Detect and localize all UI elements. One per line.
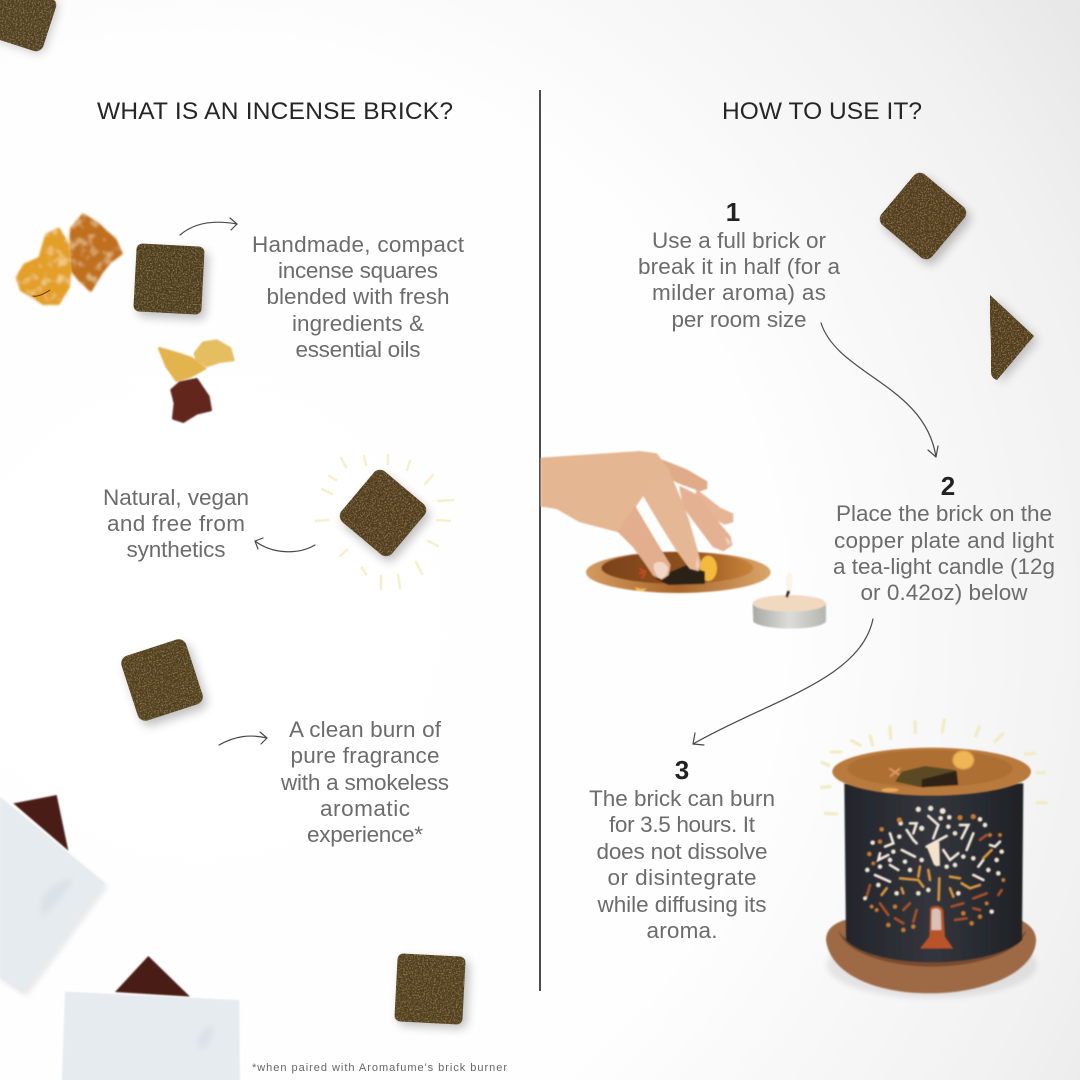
- arrow: to ingredients text: [180, 218, 237, 235]
- sachet: tilted with brick: [0, 795, 108, 997]
- heading: what is an incense brick: WHAT IS AN INCENSE BRICK?: [97, 98, 453, 125]
- text: clean burn: aromatic: [320, 796, 410, 821]
- brick: glowing: [337, 467, 432, 564]
- step 3 text: for 3.5 hours. It: [609, 812, 756, 837]
- step 3 text: [589, 786, 775, 943]
- step 2 text: Place the brick on the: [836, 501, 1052, 526]
- wooden saucer: [826, 920, 1037, 998]
- step 2 text: copper plate and light: [834, 528, 1055, 553]
- text: handmade: ingredients &: [292, 311, 424, 336]
- centre divider: [539, 90, 541, 991]
- copper plate: [586, 552, 771, 593]
- step 1 number: 1: [726, 197, 740, 227]
- brick: whole, right: [877, 170, 973, 267]
- brick: bottom: [394, 953, 470, 1029]
- text: handmade: blended with fresh: [266, 284, 450, 309]
- text: clean burn: with a smokeless: [280, 770, 449, 795]
- step 3 text: aroma.: [646, 918, 718, 943]
- step 1 text: milder aroma) as: [652, 280, 826, 305]
- text: natural: and free from: [107, 511, 245, 536]
- text: clean burn: experience*: [307, 822, 423, 847]
- arrow: to natural text: [255, 538, 315, 552]
- text: clean burn: [280, 717, 449, 847]
- step 2 text: a tea-light candle (12g: [833, 554, 1055, 579]
- brick: top-left corner: [0, 0, 60, 55]
- step 2 text: [833, 501, 1055, 605]
- hand: [541, 452, 733, 579]
- step 3 text: The brick can burn: [589, 786, 775, 811]
- copper rim and brick: [832, 748, 1031, 796]
- brick: beside resin: [133, 243, 209, 320]
- step 3 text: does not dissolve: [596, 839, 768, 864]
- body: [844, 783, 1023, 962]
- text: natural: Natural, vegan: [103, 485, 249, 510]
- icon: sun rays around brick: [316, 455, 453, 589]
- heading: how to use it: HOW TO USE IT?: [722, 98, 922, 125]
- sachet: bottom with brick: [62, 956, 240, 1080]
- step 2 number: 2: [941, 471, 955, 501]
- text: handmade: incense squares: [278, 258, 438, 283]
- image: tea-light candle: [753, 572, 826, 629]
- step 1 text: per room size: [672, 307, 806, 332]
- tree of life cut-outs: [863, 806, 1005, 949]
- text: clean burn: pure fragrance: [290, 743, 440, 768]
- arrow: to clean burn text: [219, 732, 267, 745]
- image: tree-of-life brick burner: [822, 720, 1046, 998]
- image: hand placing brick on copper plate: [541, 452, 771, 593]
- text: natural: [103, 485, 249, 562]
- footnote: *when paired with Aromafume's brick burner: [252, 1062, 507, 1074]
- text: handmade: essential oils: [296, 337, 420, 362]
- step 2 text: or 0.42oz) below: [860, 580, 1028, 605]
- brick: clean burn: [119, 637, 209, 728]
- step 3 text: while diffusing its: [596, 892, 766, 917]
- icon: amber resin pieces: [17, 215, 233, 422]
- brick: half, right: [990, 295, 1038, 384]
- step 1 text: [638, 228, 840, 332]
- text: clean burn: A clean burn of: [289, 717, 442, 742]
- step 1 text: break it in half (for a: [638, 254, 840, 279]
- burner rays: [822, 720, 1046, 814]
- step 1 text: Use a full brick or: [652, 228, 826, 253]
- text: handmade: [252, 232, 465, 362]
- step 3 number: 3: [675, 755, 689, 785]
- arrow: step 2 to step 3: [693, 619, 873, 745]
- text: handmade: Handmade, compact: [252, 232, 465, 257]
- step 3 text: or disintegrate: [608, 865, 756, 890]
- text: natural: synthetics: [126, 537, 226, 562]
- arrow: step 1 to step 2: [821, 323, 938, 457]
